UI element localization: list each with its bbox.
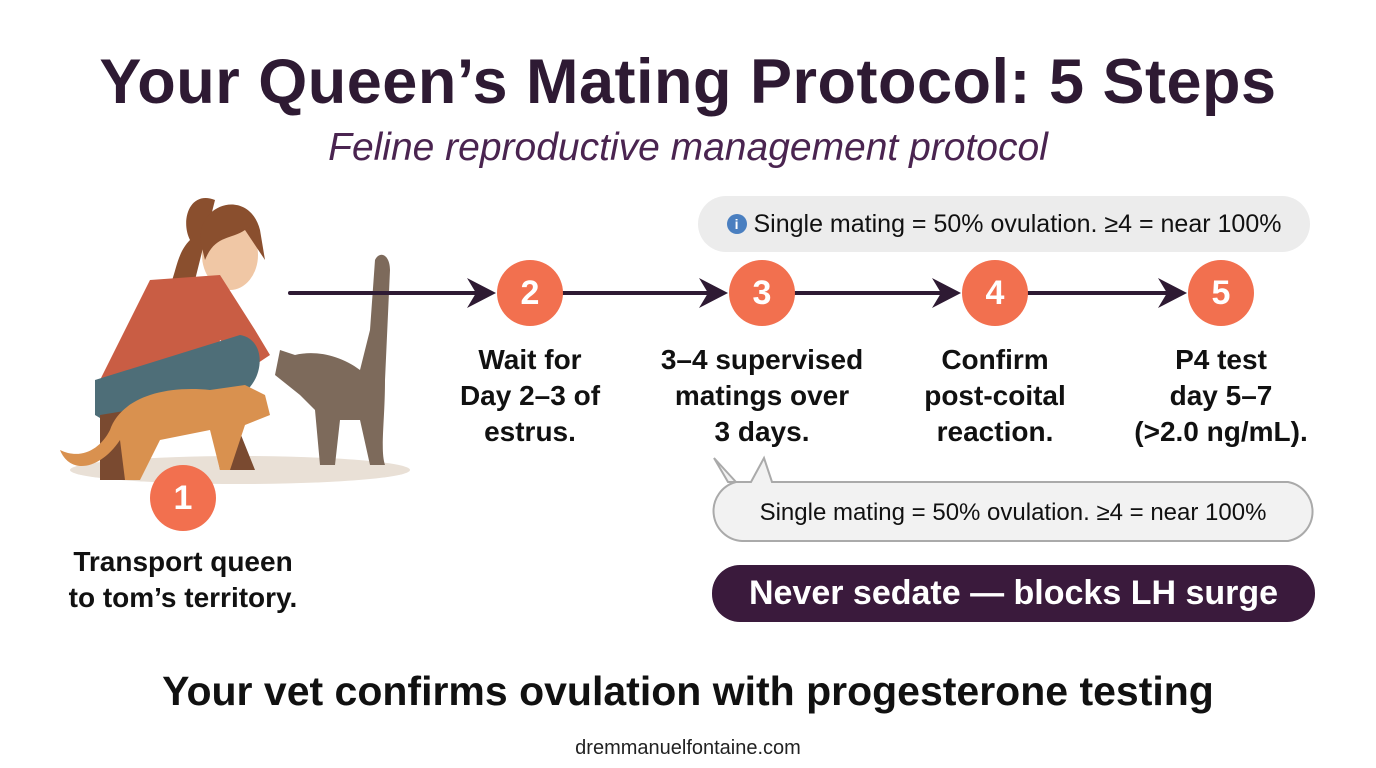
step 4 badge: 4 xyxy=(986,274,1004,312)
subtitle: Feline reproductive management protocol xyxy=(328,126,1048,169)
step 5 text: P4 test xyxy=(1175,344,1267,375)
step 4 text xyxy=(924,344,1066,447)
step 3 badge xyxy=(729,260,795,326)
step 1 text: Transport queen xyxy=(73,546,293,577)
step 3 text: 3 days. xyxy=(715,416,809,447)
info pill: Single mating = 50% ovulation. ≥4 = near 100% xyxy=(753,210,1281,238)
callout bubble xyxy=(712,456,1314,542)
step 2 text: Day 2–3 of xyxy=(460,380,600,411)
step 4 text: post-coital xyxy=(924,380,1066,411)
step 1 badge: 1 xyxy=(174,479,192,517)
step 2 badge xyxy=(497,260,563,326)
step 5 text: (>2.0 ng/mL). xyxy=(1134,416,1308,447)
step 3 text: matings over xyxy=(675,380,849,411)
step 4 text: Confirm xyxy=(941,344,1049,375)
arrow: connector line 1 to 5 xyxy=(288,278,1187,308)
step 5 badge xyxy=(1188,260,1254,326)
step 3 text xyxy=(661,344,863,447)
step 3 text: 3–4 supervised xyxy=(661,344,863,375)
warning pill xyxy=(712,565,1315,622)
title: Your Queen’s Mating Protocol: 5 Steps xyxy=(99,47,1277,117)
step 5 text: day 5–7 xyxy=(1170,380,1272,411)
info pill: i xyxy=(735,216,738,232)
step 2 text xyxy=(460,344,600,447)
step 2 text: estrus. xyxy=(484,416,576,447)
step 5 text xyxy=(1134,344,1308,447)
step 3 badge: 3 xyxy=(753,274,771,312)
info pill xyxy=(698,196,1310,252)
footer: dremmanuelfontaine.com xyxy=(575,737,801,759)
step 1 badge xyxy=(150,465,216,531)
illustration: woman with cats xyxy=(60,198,410,484)
callout bubble: Single mating = 50% ovulation. ≥4 = near 100% xyxy=(760,499,1266,526)
step 1 text: to tom’s territory. xyxy=(69,582,297,613)
step 5 badge: 5 xyxy=(1212,274,1230,312)
step 1 text xyxy=(68,546,297,613)
step 4 text: reaction. xyxy=(937,416,1053,447)
step 2 badge: 2 xyxy=(521,274,539,312)
warning pill: Never sedate — blocks LH surge xyxy=(749,574,1278,612)
bottom headline: Your vet confirms ovulation with progesterone testing xyxy=(162,668,1214,714)
step 2 text: Wait for xyxy=(478,344,582,375)
step 4 badge xyxy=(962,260,1028,326)
